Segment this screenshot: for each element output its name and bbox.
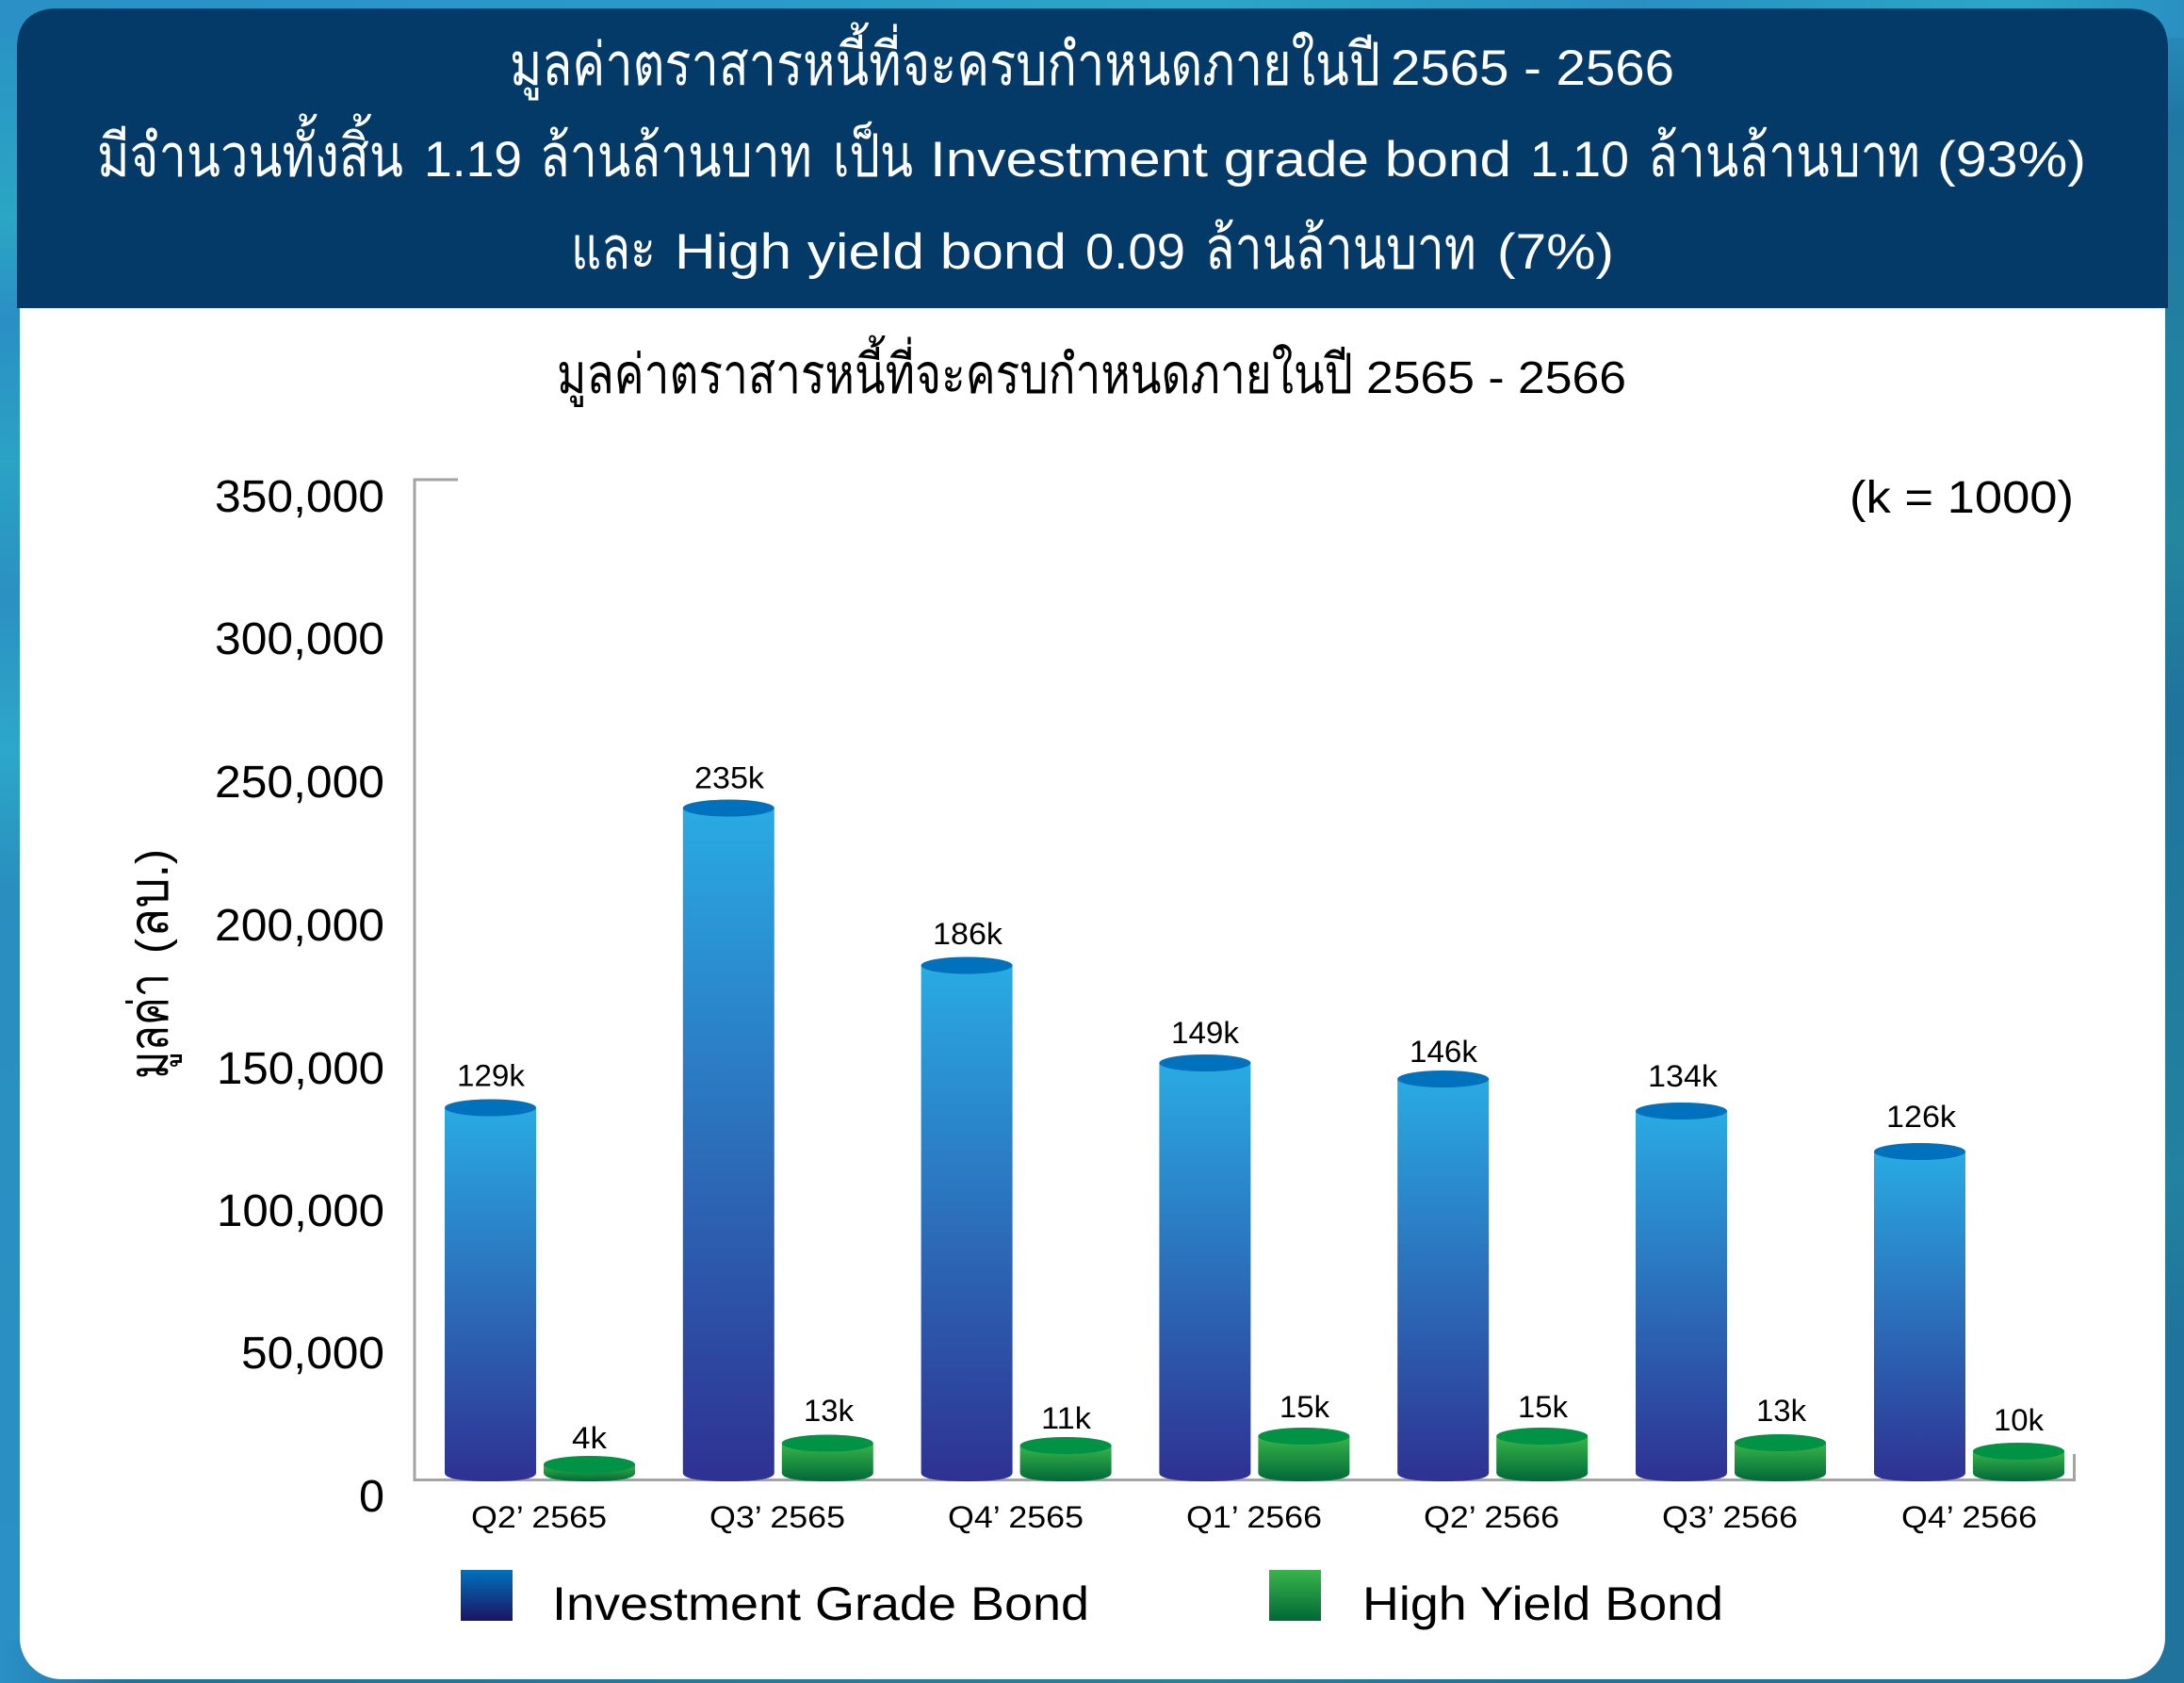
header line 2: มีจำนวนทั้งสิ้น — [97, 113, 403, 189]
y axis title — [119, 849, 182, 1079]
bars: Q4' 2565: 186k — [933, 917, 1003, 951]
header line 2: Investment grade bond — [930, 132, 1511, 188]
header line 1: มูลค่าตราสารหนี้ที่จะครบกำหนดภายในปี — [510, 22, 1380, 101]
y axis title: ) — [128, 849, 178, 864]
bars: Q1' 2566: 15k — [1279, 1390, 1330, 1424]
panel: header banner — [17, 8, 2168, 308]
bars: Q1' 2566: 149k — [1171, 1016, 1240, 1050]
unit note: (k = 1000) — [1850, 473, 2074, 523]
header line 2: 1.10 — [1530, 132, 1629, 188]
header line 3: ล้านล้านบาท — [1205, 216, 1476, 282]
y axis tick labels: 350,000 — [215, 472, 384, 522]
bars: Q1' 2566 — [1159, 1016, 1349, 1481]
bars: Q2' 2566: 146k — [1410, 1035, 1478, 1069]
x axis labels: Q2’ 2566 — [1424, 1500, 1559, 1534]
header line 2: 1.19 — [424, 132, 522, 188]
bars: Q4' 2565: 11k — [1041, 1401, 1092, 1435]
legend: high yield bond — [1269, 1570, 1723, 1630]
bars: Q2' 2565 — [445, 1059, 635, 1481]
bars: Q4' 2565 — [921, 917, 1112, 1481]
legend: investment grade bond — [461, 1570, 1089, 1630]
y axis tick labels: 150,000 — [217, 1044, 384, 1094]
header line 2: ล้านล้านบาท — [540, 123, 812, 189]
bars: Q3' 2566 — [1636, 1059, 1826, 1481]
header line 1: 2565 - 2566 — [1391, 41, 1674, 96]
x axis labels: Q4’ 2565 — [948, 1500, 1084, 1534]
bars: Q3' 2565: 235k — [694, 761, 765, 795]
bars: Q4' 2566 — [1874, 1100, 2064, 1481]
x axis labels: Q2’ 2565 — [471, 1500, 607, 1534]
x axis labels — [471, 1500, 2037, 1534]
y axis tick labels: 0 — [359, 1472, 384, 1522]
legend: high yield bond: High Yield Bond — [1362, 1577, 1723, 1630]
bars: Q2' 2565: 129k — [457, 1059, 526, 1093]
bars: Q3' 2565: 13k — [804, 1394, 855, 1428]
y axis tick labels: 100,000 — [217, 1186, 384, 1236]
x axis labels: Q3’ 2565 — [709, 1500, 845, 1534]
bars: Q3' 2566: 134k — [1648, 1059, 1719, 1093]
y axis tick labels: 300,000 — [215, 614, 384, 664]
y axis title: ( — [128, 939, 178, 954]
y axis tick labels: 50,000 — [241, 1329, 384, 1379]
x axis labels: Q4’ 2566 — [1901, 1500, 2037, 1534]
bars: Q3' 2566: 13k — [1756, 1394, 1807, 1428]
chart title: มูลค่าตราสารหนี้ที่จะครบกำหนดภายในปี — [557, 335, 1353, 407]
y axis title: ลบ. — [119, 864, 180, 938]
bars: Q2' 2566: 15k — [1518, 1390, 1569, 1424]
header line 3 — [571, 216, 1614, 282]
y axis tick labels: 200,000 — [215, 901, 384, 951]
header line 3: และ — [571, 216, 656, 282]
chart axes — [415, 480, 2075, 1479]
y axis title: มูลค่า — [119, 973, 182, 1079]
bars: Q3' 2565 — [683, 761, 873, 1481]
header line 2: (93%) — [1937, 132, 2086, 188]
header line 3: 0.09 — [1085, 224, 1185, 280]
x axis labels: Q3’ 2566 — [1662, 1500, 1798, 1534]
y axis tick labels: 250,000 — [215, 758, 384, 808]
y axis tick labels — [215, 472, 384, 1522]
legend: investment grade bond: Investment Grade Bond — [552, 1577, 1089, 1630]
header line 2: ล้านล้านบาท — [1648, 123, 1920, 189]
x axis labels: Q1’ 2566 — [1186, 1500, 1322, 1534]
header line 3: (7%) — [1497, 224, 1614, 280]
bars: Q4' 2566: 10k — [1994, 1403, 2045, 1437]
header line 2 — [97, 113, 2086, 189]
bars: Q2' 2566 — [1397, 1035, 1588, 1481]
bars: Q2' 2565: 4k — [572, 1421, 608, 1455]
bars: Q4' 2566: 126k — [1886, 1100, 1957, 1134]
header line 2: เป็น — [833, 121, 913, 189]
chart title: 2565 - 2566 — [1366, 353, 1626, 403]
header line 3: High yield bond — [675, 224, 1067, 280]
